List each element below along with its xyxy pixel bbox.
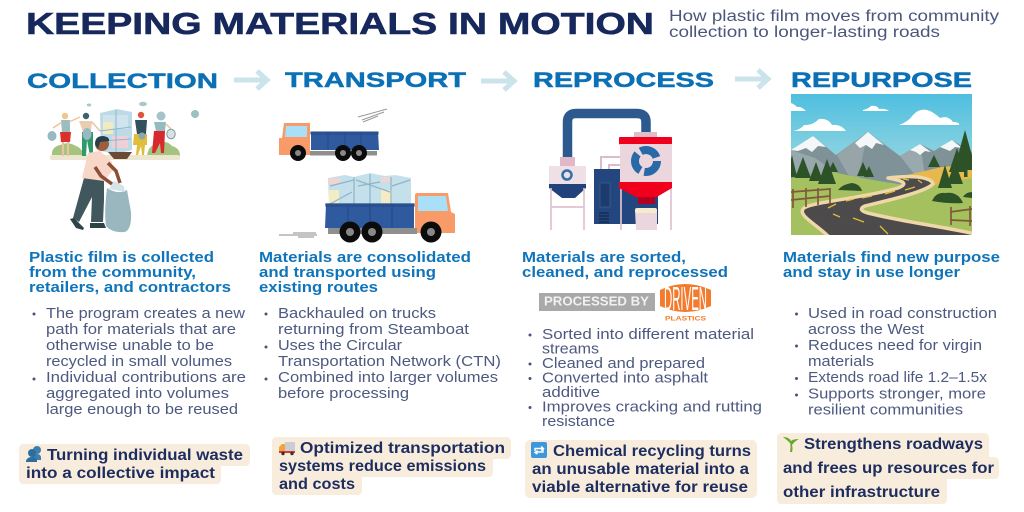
bullet list: repurpose [795,305,997,418]
arrow: reprocess to repurpose [735,70,768,88]
bullet list: reprocess: Converted into asphalt [542,370,709,386]
bullet list: repurpose: Extends road life 1.2–1.5x [808,369,988,386]
bullet list: reprocess: resistance [542,413,615,430]
heading: transport: TRANSPORT [285,69,466,92]
bullet list: reprocess: Improves cracking and rutting [542,398,762,416]
illustration: empty truck [279,109,387,161]
bullet list: repurpose: Used in road construction [808,305,997,322]
callout: strengthens roadways: other infrastructure [783,484,940,501]
bullet list: transport: returning from Steamboat [278,321,470,338]
bullet list: reprocess: Cleaned and prepared [542,355,705,372]
bullet list: reprocess: Sorted into different material [542,326,754,343]
bullet list: collection [32,305,246,418]
subheading: reprocess: Materials are sorted, [522,249,686,266]
logo: Driven Plastics: DRIVEN [664,281,707,318]
subheading: transport [259,249,471,296]
callout: optimized transportation: systems reduce emissions [279,458,486,475]
bullet list: reprocess [528,326,762,430]
subheading: collection: retailers, and contractors [29,279,231,296]
bullet list: repurpose: Supports stronger, more [808,386,986,402]
callout: optimized transportation: and costs [279,476,355,493]
callout: chemical recycling: an unusable material into a [532,461,749,478]
badge: processed by: PROCESSED BY [544,294,650,308]
subheading: collection: from the community, [29,264,196,281]
subheading: reprocess: cleaned, and reprocessed [522,264,728,281]
bullet list: transport: Transportation Network (CTN) [278,353,501,370]
callout: strengthens roadways: Strengthens roadways [804,436,983,453]
subheading: repurpose: and stay in use longer [783,264,960,281]
illustration: reprocessing machinery [549,114,672,230]
panel: collection text [19,249,250,484]
icon: delivery truck [279,442,295,455]
bullet list: collection: path for materials that are [46,321,236,338]
subheading: transport: existing routes [259,279,378,296]
callout: strengthens roadways [777,433,999,504]
subtitle [669,8,999,41]
callout: strengthens roadways: and frees up resources for [783,460,994,477]
subheading: collection [29,249,231,296]
callout: optimized transportation [272,437,511,495]
callout: collective impact [19,444,250,484]
subtitle: How plastic film moves from community [669,8,999,25]
subtitle: collection to longer-lasting roads [669,24,940,41]
arrow: collection to transport [234,71,267,89]
heading: reprocess: REPROCESS [533,69,714,92]
subheading: collection: Plastic film is collected [29,249,214,266]
bullet list: collection: large enough to be reused [46,401,238,418]
bullet list: collection: aggregated into volumes [46,385,229,402]
illustration: loaded truck [279,173,455,242]
subheading: reprocess [522,249,728,281]
panel: transport text [259,249,511,495]
bullet list: collection: recycled in small volumes [46,353,232,370]
bullet list: collection: The program creates a new [46,305,245,322]
callout: collective impact: Turning individual waste [47,447,243,464]
bullet list: repurpose: across the West [808,321,925,338]
bullet list: transport: Combined into larger volumes [278,369,498,386]
bullet list: transport: before processing [278,385,409,402]
callout: chemical recycling [525,440,757,498]
subheading: repurpose: Materials find new purpose [783,249,1000,266]
logo: Driven Plastics: PLASTICS [665,316,706,322]
panel: repurpose text [777,249,1000,504]
subheading: transport: and transported using [259,264,436,281]
callout: optimized transportation: Optimized transportation [300,440,505,457]
callout: collective impact: into a collective impact [26,465,215,482]
icon: seedling [783,437,799,452]
bullet list: transport: Uses the Circular [278,337,402,354]
icon: people silhouettes [26,446,41,462]
arrow: transport to reprocess [481,72,514,90]
illustration: mountain road landscape [787,94,976,240]
bullet list: reprocess: streams [542,340,599,358]
bullet list: repurpose: Reduces need for virgin [808,337,982,354]
bullet list: transport [264,305,501,402]
callout: chemical recycling: Chemical recycling turns [553,443,751,460]
callout: chemical recycling: viable alternative for reuse [532,479,748,496]
title: KEEPING MATERIALS IN MOTION [26,7,654,41]
bullet list: collection: Individual contributions are [46,369,246,386]
subheading: transport: Materials are consolidated [259,249,471,266]
bullet list: collection: otherwise unable to be [46,337,214,354]
illustration: community collection [48,102,199,232]
heading: repurpose: REPURPOSE [791,69,972,92]
bullet list: transport: Backhauled on trucks [278,305,436,322]
heading: collection: COLLECTION [27,70,218,93]
bullet list: reprocess: additive [542,384,600,401]
subheading: repurpose [783,249,1000,281]
bullet list: repurpose: resilient communities [808,402,963,418]
badge: processed by [539,293,655,311]
bullet list: repurpose: materials [808,353,874,370]
icon: refresh arrows [531,442,547,458]
panel: reprocess text [522,249,762,498]
